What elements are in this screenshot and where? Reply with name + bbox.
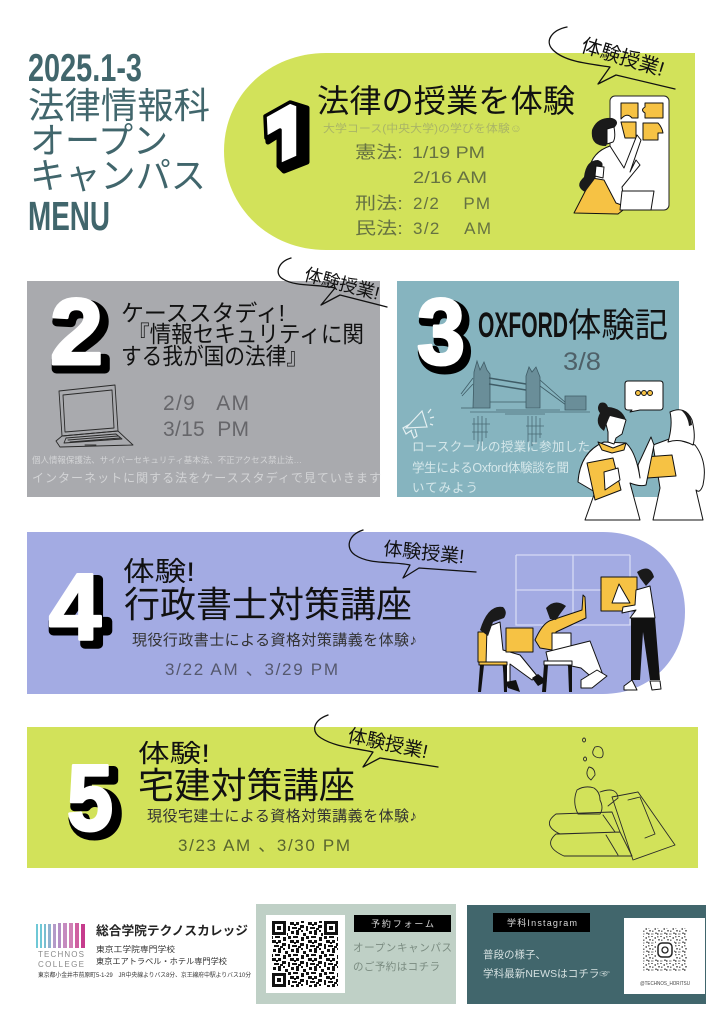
description: 学生によるOxford体験談を聞 [412,460,569,475]
panel: 5 takken [27,715,698,868]
heading: 体験記 [568,307,668,345]
callout: taiken jugyo [349,530,476,578]
illustration: people at puzzle board [574,96,669,214]
title: オープン [30,120,168,161]
panel: instagram [467,905,706,1004]
panel: 2 case study [27,258,387,497]
description [32,455,381,485]
icon: laptop [56,385,133,447]
logo stripes [36,923,85,948]
panel: reservation form [256,904,456,1004]
dates: 刑法: [355,194,403,213]
number 5: 5 [67,745,113,850]
dates: 民法: [355,219,403,238]
number 2: 2 [50,279,103,384]
footer: college logo and address: 東京工学院専門学校 [96,944,175,954]
dates: 2/16 AM [413,168,487,187]
callout: taiken jugyo [549,27,675,89]
number 3: 3 [420,284,470,389]
footer: college logo and address: COLLEGE [38,960,84,969]
callout: taiken jugyo: 体験授業! [382,538,465,568]
dates: 憲法: [355,143,403,162]
text [353,942,452,973]
description: 現役宅建士による資格対策講義を体験♪ [147,808,417,825]
text: のご予約はコチラ [353,960,440,973]
instagram qr card: @TECHNOS_HORITSU [640,981,690,987]
title: 法律情報科 [28,85,210,126]
heading: する我が国の法律』 [121,343,307,369]
callout: taiken jugyo: 体験授業! [579,34,667,81]
callout: taiken jugyo: 体験授業! [302,264,382,304]
heading [123,557,412,625]
heading: 法律の授業を体験 [317,83,575,119]
footer: college logo and address: 東京エアトラベル・ホテル専門学校 [96,956,227,966]
footer: college logo and address: TECHNOS [38,950,84,959]
number 4: 4 [52,559,108,664]
description: インターネットに関する法をケーススタディで見ていきます [32,470,381,485]
heading: 『情報セキュリティに関 [128,321,364,347]
college name: 総合学院テクノスカレッジ [96,923,248,938]
title: キャンパス [30,155,206,196]
number 4: 4 [49,554,101,659]
description: いてみよう [412,481,478,495]
description: 個人情報保護法、サイバーセキュリティ基本法、不正アクセス禁止法… [32,455,302,465]
speech bubble [625,381,663,412]
callout: taiken jugyo [278,258,387,307]
dates: 3/22 AM 、3/29 PM [165,660,338,679]
number 1 [265,102,307,171]
dates: 3/23 AM 、3/30 PM [178,836,350,855]
dates [355,143,491,238]
number 5: 5 [70,750,120,855]
illustration: two women talking [578,381,704,520]
dates: 3/15 PM [163,418,249,441]
text: 学科最新NEWSはコチラ☞ [483,967,610,980]
number 2: 2 [53,284,109,389]
illustration: tower bridge [461,361,590,446]
date: 3/8 [563,348,601,376]
dates: 2/9 AM [163,392,249,415]
address: 東京都小金井市前原町5-1-29 JR中央線よりバス8分、京王線府中駅よりバス10分 [38,971,251,979]
footer: college logo and address [36,923,251,979]
instagram qr card [624,918,705,994]
qr code [266,915,345,993]
description [412,439,590,495]
panel: 4 gyosei shoshi [27,530,685,694]
text: 普段の様子、 [483,948,546,961]
dates: 1/19 PM [412,143,485,162]
title: 2025.1-3 [28,47,142,90]
heading: 体験! [123,557,195,587]
panel: 3 oxford [397,279,704,520]
label: 学科Instagram [507,917,577,928]
callout: taiken jugyo: 体験授業! [346,725,430,763]
label [493,913,590,932]
heading [121,300,364,369]
dates: 3/2 AM [413,219,491,238]
illustration: three people with boards [478,555,661,692]
dates: 2/2 PM [413,194,490,213]
heading: OXFORD [478,306,568,345]
subtitle: 大学コース(中央大学)の学びを体験☺ [323,121,522,135]
heading: 体験! [138,740,210,768]
heading [138,740,355,806]
heading: 宅建対策講座 [138,765,355,806]
dates [163,392,249,441]
description: 現役行政書士による資格対策講義を体験♪ [132,632,417,649]
label: 予約フォーム [371,918,434,929]
heading: 行政書士対策講座 [124,584,412,625]
text [483,948,610,980]
illustration: books and mug [549,738,675,860]
callout: taiken jugyo [315,715,438,767]
number 3: 3 [417,279,465,384]
text: オープンキャンパス [353,942,452,954]
heading: ケーススタディ! [121,300,285,326]
label [354,915,451,932]
title [28,47,210,239]
icon: megaphone [403,409,434,438]
panel: 1 law class [224,27,695,250]
description: ロースクールの授業に参加した [412,439,590,454]
title: MENU [28,193,110,239]
